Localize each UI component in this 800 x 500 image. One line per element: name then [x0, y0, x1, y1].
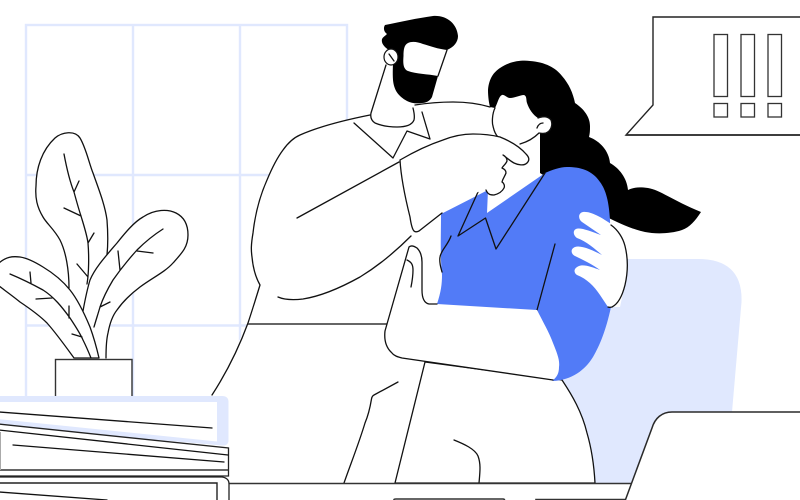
plant pot [56, 360, 132, 400]
desk drawers [394, 499, 626, 500]
speech bubble [626, 17, 800, 135]
man shoulder and side outline [212, 115, 370, 395]
armchair [555, 259, 742, 484]
man pointing arm [297, 134, 529, 232]
top light blue book [0, 396, 228, 446]
right leaf [83, 210, 188, 358]
man neck [371, 50, 432, 127]
woman [395, 61, 701, 483]
left leaf [0, 257, 99, 358]
man trouser crease [344, 382, 398, 483]
man [212, 16, 500, 483]
man far shoulder [415, 102, 490, 107]
man sleeve [400, 134, 500, 232]
desk [229, 484, 632, 500]
woman neck [470, 108, 540, 215]
woman lower body [395, 362, 595, 483]
man hand [470, 137, 529, 195]
tall leaf [36, 133, 108, 300]
woman skirt pocket [454, 440, 480, 483]
exclamation marks [714, 34, 782, 117]
bottom book [0, 477, 229, 500]
laptop [625, 412, 800, 500]
shirt collar lines [458, 173, 545, 249]
woman blue shirt [437, 167, 611, 381]
man collar [354, 112, 430, 158]
middle book [0, 424, 228, 476]
woman forearm [384, 246, 559, 380]
man beard and hair [382, 16, 458, 103]
man ear [384, 49, 398, 65]
man waist line [248, 323, 388, 325]
shirt seam lines [440, 236, 555, 310]
man arm underside [278, 236, 411, 300]
woman thumb [407, 260, 413, 287]
man torso [212, 100, 500, 483]
stack of books [0, 396, 229, 500]
window frame [26, 25, 347, 405]
woman hair and braid [488, 61, 701, 233]
man face [403, 42, 447, 76]
plant [0, 133, 188, 400]
woman hand on back [572, 212, 628, 307]
woman face [492, 95, 552, 144]
